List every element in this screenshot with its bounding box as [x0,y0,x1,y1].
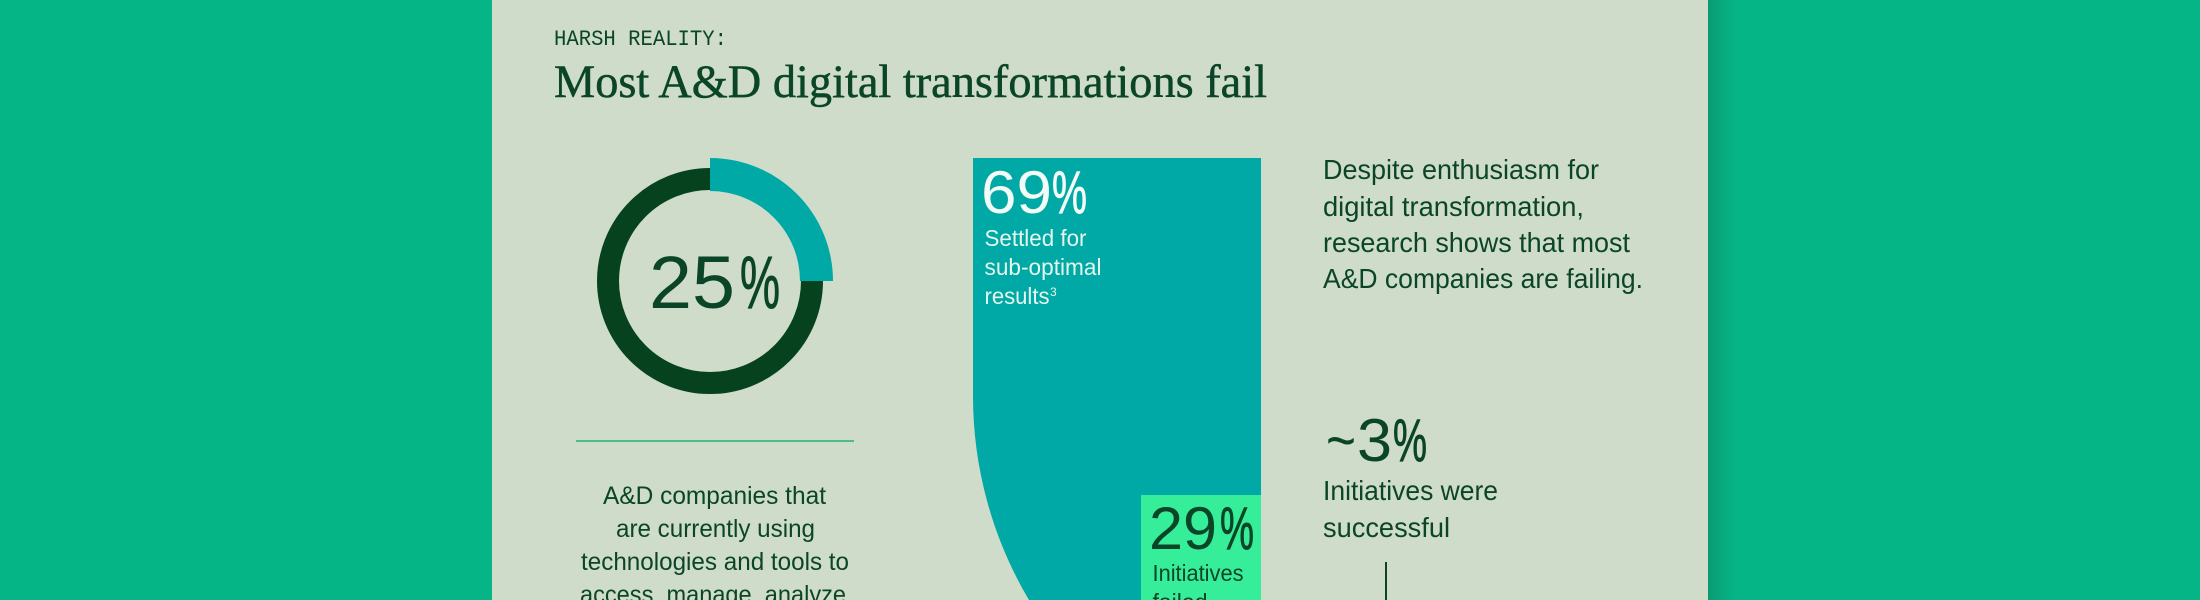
text block: intro: A&D companies are failing. [1323,263,1643,294]
panel shadow [1708,0,1734,600]
segment: 29% failed [1141,495,1261,600]
text block: A&D companies: A&D companies that [603,482,826,510]
leader line [1385,562,1387,600]
eyebrow heading: HARSH REALITY: [554,27,727,52]
title: Most A&D digital transformations fail [554,56,1267,108]
stat: ~3% successful: ~ [1326,407,1356,474]
chart: initiative outcomes [973,158,1261,600]
donut chart: 25%: % [740,241,780,324]
segment: 69% settled: 69 [981,159,1052,226]
text block: intro: Despite enthusiasm for [1323,154,1599,185]
segment: 29% failed: 29 [1149,495,1217,562]
stat: ~3% successful: 3 [1357,407,1392,474]
divider line [576,440,854,442]
donut chart: 25%: 25 [649,241,735,324]
text block: A&D companies: technologies and tools to [581,548,849,576]
panel: harsh reality [492,0,1708,600]
text block: A&D companies [580,482,849,600]
stat: ~3% successful: successful [1323,512,1450,543]
segment: 69% settled: 3 [1050,285,1057,299]
text block: intro: digital transformation, [1323,191,1584,222]
segment: 69% settled: % [1052,159,1087,226]
text block: A&D companies: are currently using [616,515,815,543]
segment: 69% settled: Settled for [984,225,1087,251]
stat: ~3% successful [1323,407,1498,543]
text block: intro [1323,154,1643,294]
segment: 29% failed: Initiatives [1152,560,1244,586]
segment: 29% failed: % [1220,495,1254,562]
text block: intro: research shows that most [1323,227,1630,258]
segment: 69% settled [973,158,1261,600]
segment: 69% settled: sub-optimal [984,254,1102,280]
donut chart: 25% [608,158,833,383]
segment: 69% settled: results [984,283,1050,309]
stat: ~3% successful: % [1393,407,1427,474]
stat: ~3% successful: Initiatives were [1323,475,1498,506]
